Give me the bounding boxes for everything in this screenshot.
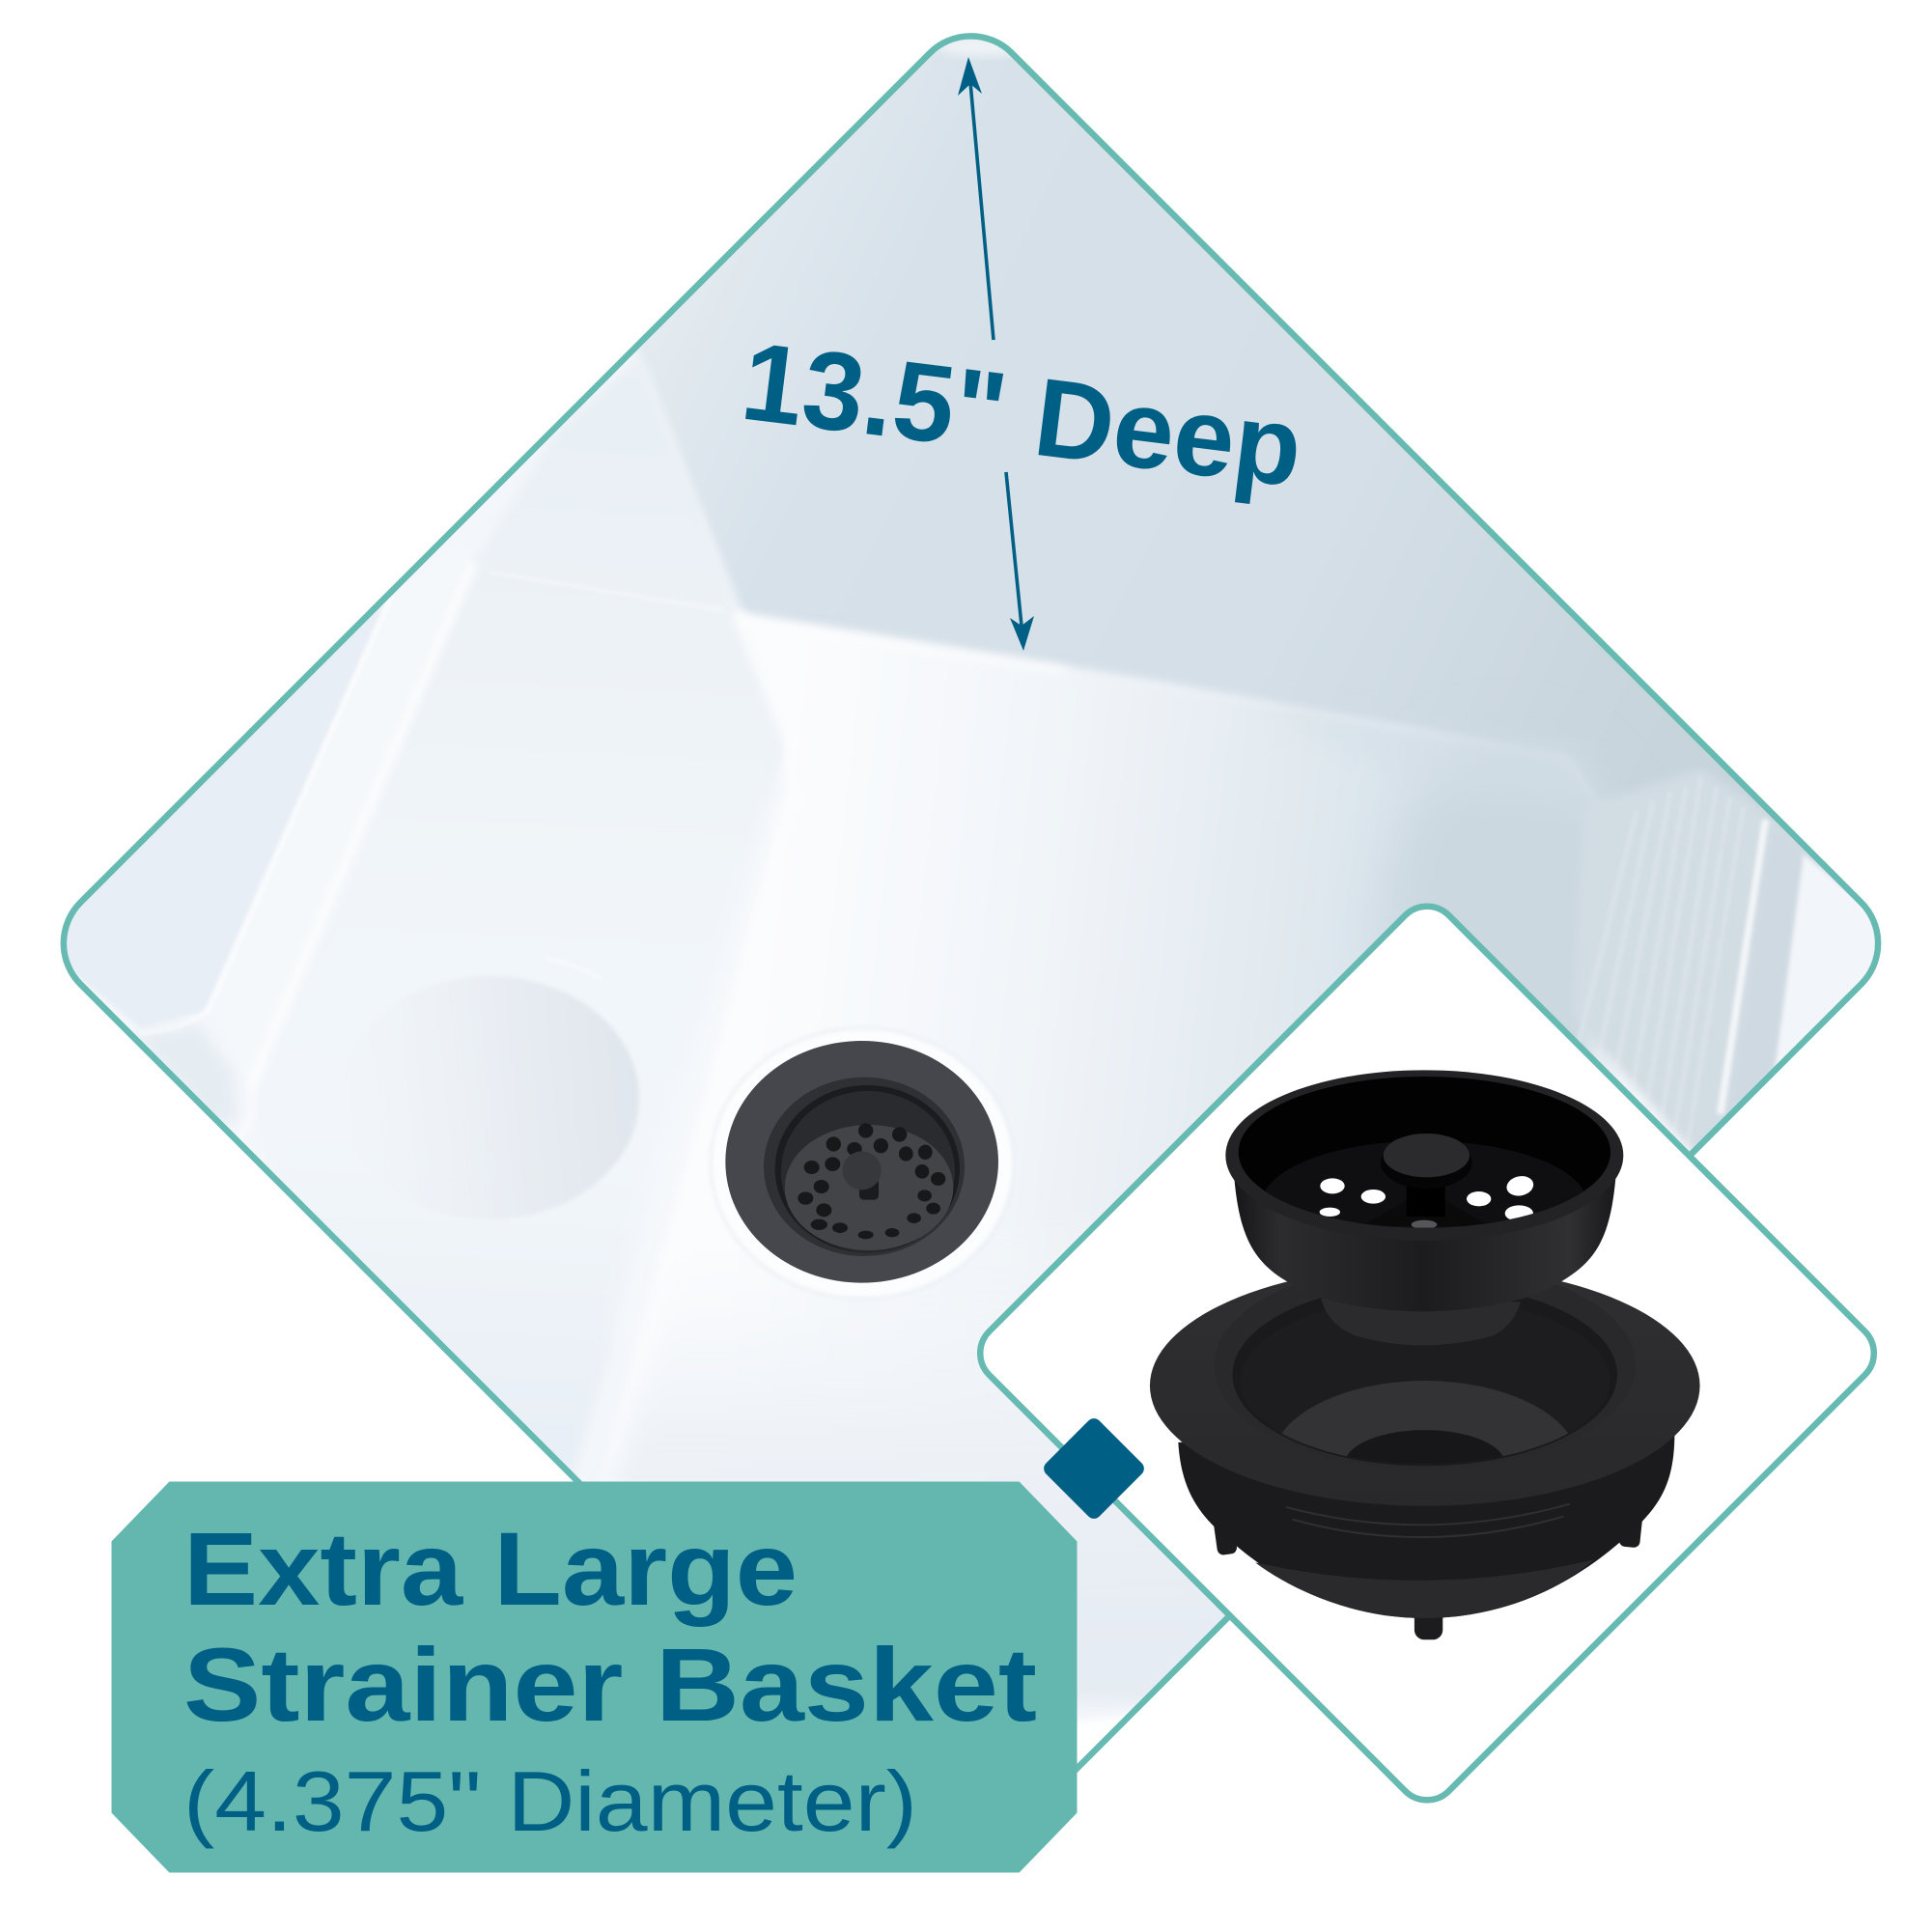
grey side band — [1748, 1066, 1773, 1093]
soft wall and floor seam on right — [1255, 705, 1612, 811]
recessed circle in divider — [487, 979, 639, 1213]
ribs — [1578, 1031, 1582, 1041]
arrow: down — [1006, 472, 1034, 651]
drain flange and strainer — [725, 1041, 998, 1283]
product photo: drain flange — [1150, 1262, 1700, 1639]
floor lower shading — [612, 1380, 855, 1481]
panel: strainer inset diamond — [967, 893, 1887, 1813]
ridge highlights — [141, 567, 1062, 1332]
divider left band — [67, 606, 382, 1026]
heading line one: Extra Large — [183, 1510, 798, 1627]
product photo: strainer basket — [1217, 1062, 1632, 1345]
inset background — [967, 893, 1887, 1813]
diameter note: (4.375" Diameter) — [183, 1753, 917, 1849]
basket interior — [1238, 1077, 1610, 1228]
sink rim at right tip — [1775, 855, 1875, 1066]
basket knob — [1381, 1136, 1472, 1189]
floor dark corner shading — [1383, 799, 1610, 1072]
drain stopper knob — [859, 1181, 879, 1200]
sink floor — [760, 631, 1584, 1203]
divider middle panel — [485, 369, 782, 1470]
lower plate and bowl — [1178, 1433, 1674, 1618]
drain surround ring — [944, 1073, 1010, 1273]
icon: connector diamond — [1041, 1415, 1147, 1522]
basket body — [1234, 1178, 1615, 1311]
drain holes — [798, 1123, 945, 1239]
flange well — [1282, 1381, 1568, 1456]
basket stem — [1321, 1299, 1521, 1345]
divider side band — [208, 541, 473, 1084]
bright rib strip — [1721, 820, 1766, 1114]
basket stem and hub — [1361, 1200, 1490, 1226]
basket holes — [1320, 1174, 1535, 1221]
basket rim — [1225, 1070, 1623, 1241]
flange ring — [1150, 1266, 1700, 1506]
heading line two: Strainer Basket — [183, 1626, 1037, 1743]
back wall of sink — [637, 40, 1809, 855]
bowl lower tone — [1255, 1559, 1594, 1618]
divider base shading — [143, 1028, 234, 1122]
legs — [1213, 1509, 1643, 1639]
callout: 13.5 inch deep dimension — [736, 57, 1308, 651]
apex highlight — [940, 39, 1010, 58]
threads — [1286, 1504, 1570, 1537]
ribbed side wall — [1597, 774, 1799, 1151]
dimension text: 13.5" Deep — [736, 320, 1308, 511]
arrow: up — [958, 57, 994, 340]
label background — [113, 1483, 1076, 1871]
panel: title label — [113, 1483, 1076, 1871]
floor front edge highlight — [1078, 1718, 1123, 1763]
